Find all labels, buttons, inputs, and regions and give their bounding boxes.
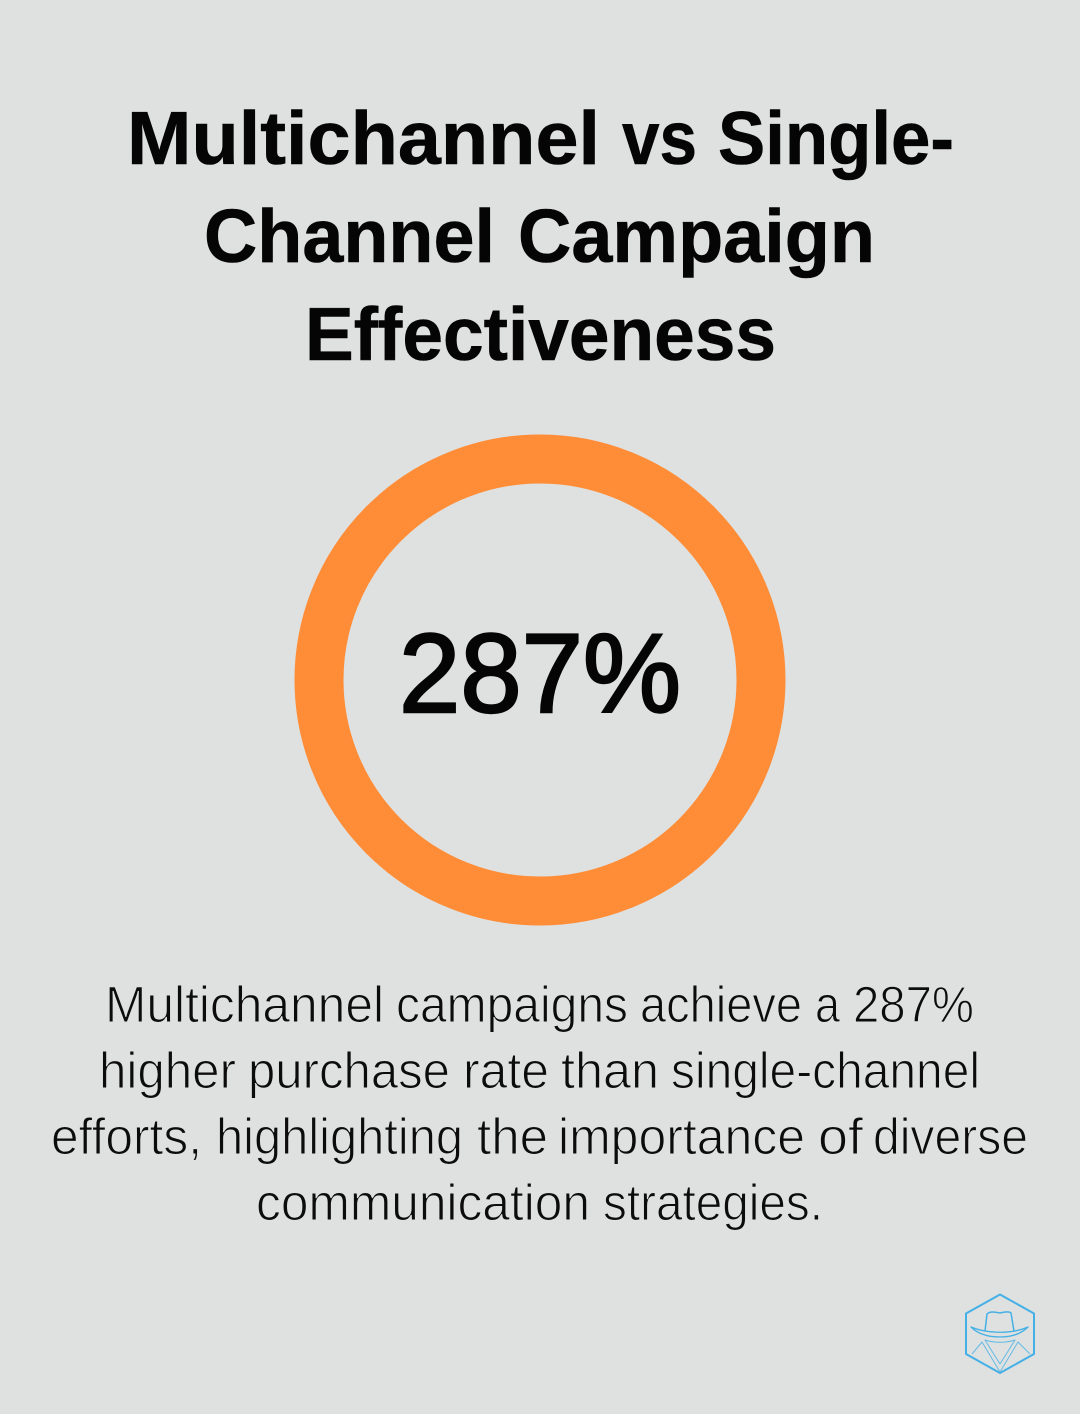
- description text: rate: [463, 1042, 549, 1099]
- description text: Multichannel: [105, 976, 384, 1033]
- description text: higher: [99, 1042, 236, 1099]
- title: Single-: [718, 96, 954, 180]
- title: vs: [622, 96, 697, 180]
- stat value: 287%: [399, 611, 681, 736]
- title: Campaign: [518, 194, 875, 278]
- description text: than: [561, 1042, 659, 1099]
- description text: strategies.: [603, 1174, 823, 1231]
- description text: achieve: [640, 976, 802, 1033]
- description text: efforts,: [51, 1108, 202, 1165]
- description text: [51, 976, 1028, 1231]
- description text: of: [818, 1108, 864, 1165]
- title: Effectiveness: [305, 292, 776, 376]
- title: Multichannel: [127, 96, 600, 180]
- donut ring: [319, 459, 761, 901]
- description text: the: [477, 1108, 548, 1165]
- description text: diverse: [873, 1108, 1028, 1165]
- description text: highlighting: [216, 1108, 463, 1165]
- description text: campaigns: [396, 976, 628, 1033]
- description text: importance: [558, 1108, 805, 1165]
- description text: communication: [256, 1174, 590, 1231]
- description text: single-channel: [671, 1042, 980, 1099]
- description text: purchase: [248, 1042, 450, 1099]
- icon: hexagon logo with hat: [966, 1294, 1034, 1373]
- description text: 287%: [853, 976, 974, 1033]
- description text: a: [815, 976, 841, 1033]
- title: [127, 96, 954, 376]
- title: Channel: [204, 194, 495, 278]
